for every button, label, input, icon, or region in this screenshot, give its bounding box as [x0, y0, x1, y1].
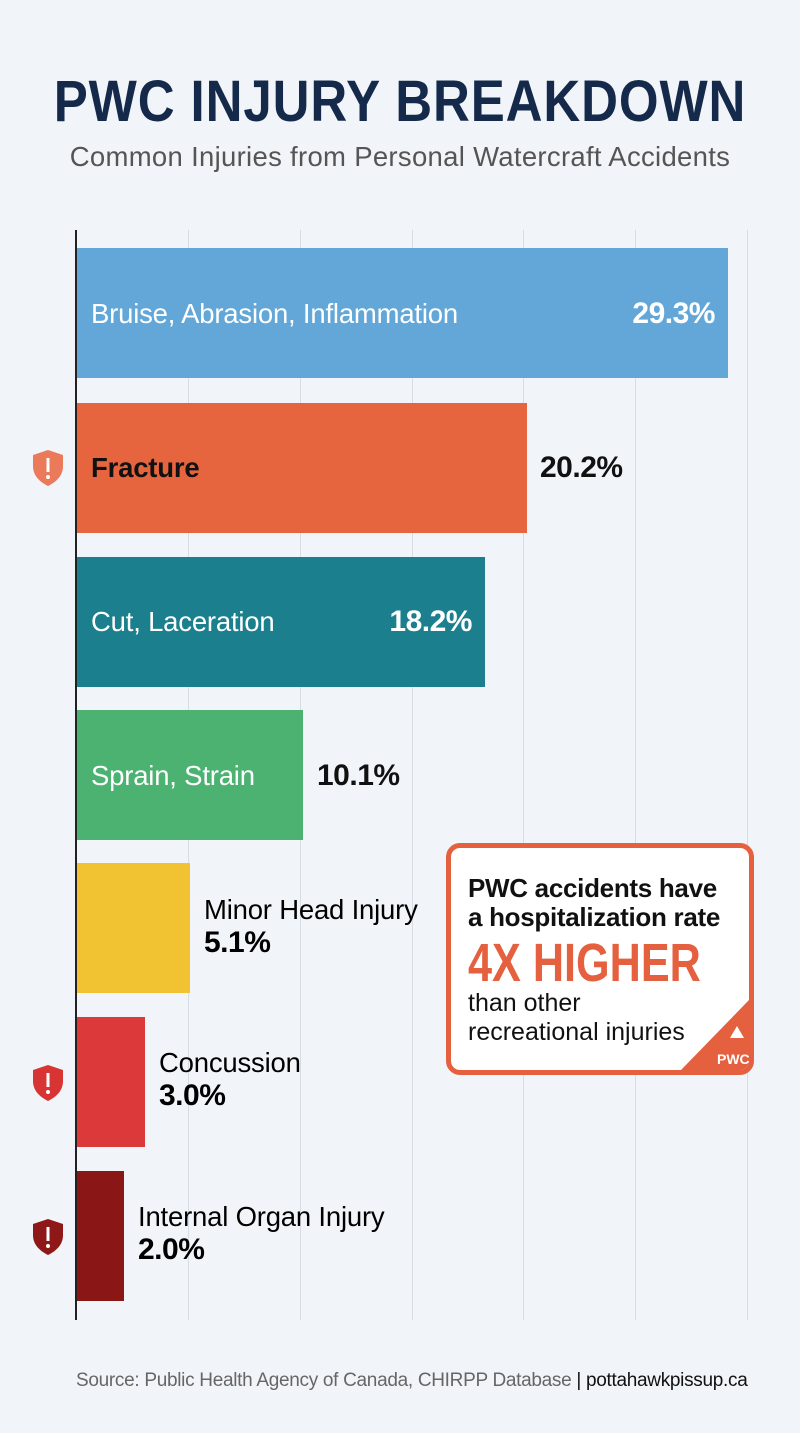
bar: cut: 18.2%	[389, 605, 472, 638]
callout text	[468, 873, 720, 932]
bar: internal organ	[77, 1171, 124, 1301]
callout text: PWC accidents have	[468, 873, 717, 903]
callout subtext: recreational injuries	[468, 1018, 685, 1046]
icon: concussion shield	[33, 1065, 63, 1101]
label: internal organ	[138, 1201, 384, 1266]
label: minor head: 5.1%	[204, 926, 270, 959]
icon: PWC corner badge	[681, 1000, 750, 1070]
bar: fracture	[77, 403, 527, 533]
icon: PWC corner badge: PWC	[717, 1051, 750, 1067]
callout text: a hospitalization rate	[468, 902, 720, 932]
bar: bruise: 29.3%	[632, 297, 715, 330]
callout highlight: 4X HIGHER	[468, 933, 701, 993]
bar: bruise: Bruise, Abrasion, Inflammation	[91, 298, 458, 329]
axis line	[75, 230, 77, 1320]
icon: fracture shield	[33, 450, 63, 486]
bar: sprain: Sprain, Strain	[91, 760, 255, 791]
label: internal organ: Internal Organ Injury	[138, 1201, 384, 1232]
callout subtext: than other	[468, 989, 581, 1017]
label: minor head	[204, 894, 418, 959]
label: concussion: Concussion	[159, 1047, 301, 1078]
bar: fracture: Fracture	[91, 452, 199, 483]
bar: minor head	[77, 863, 190, 993]
label: internal organ: 2.0%	[138, 1233, 204, 1266]
subtitle: Common Injuries from Personal Watercraft Accidents	[70, 141, 730, 172]
bar: bruise	[77, 248, 728, 378]
bar: cut: Cut, Laceration	[91, 606, 274, 637]
bar: concussion	[77, 1017, 145, 1147]
icon: internal organ shield	[33, 1219, 63, 1255]
callout	[446, 843, 754, 1075]
callout subtext	[468, 989, 685, 1046]
label: concussion	[159, 1047, 301, 1112]
bar: cut	[77, 557, 485, 687]
bar: sprain	[77, 710, 303, 840]
value: sprain: 10.1%	[317, 759, 400, 792]
value: fracture: 20.2%	[540, 451, 623, 484]
label: minor head: Minor Head Injury	[204, 894, 418, 925]
title: PWC INJURY BREAKDOWN	[54, 69, 746, 134]
source footer: Source: Public Health Agency of Canada, CHIRPP Database | pottahawkpissup.ca	[76, 1370, 747, 1391]
label: concussion: 3.0%	[159, 1079, 225, 1112]
